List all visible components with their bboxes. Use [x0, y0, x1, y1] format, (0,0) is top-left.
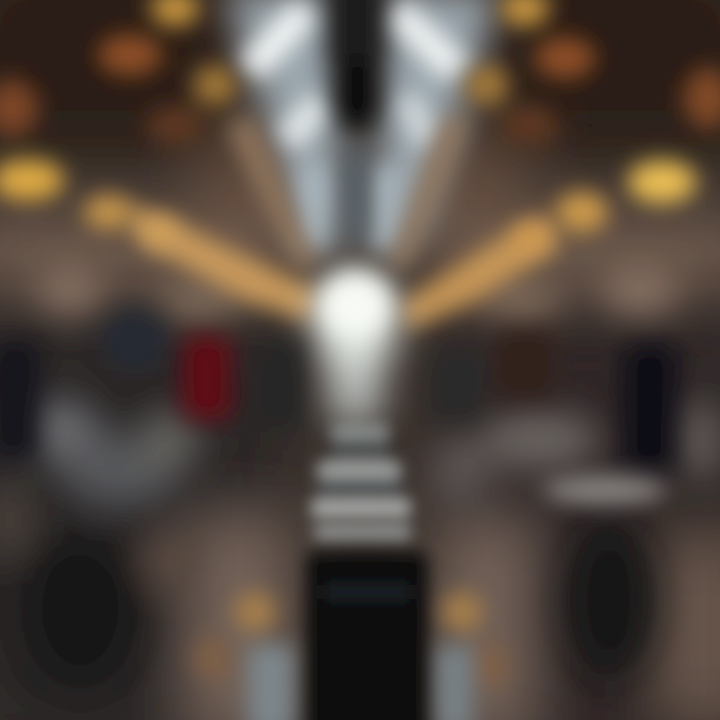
crowd mottling — [0, 266, 720, 690]
red garment — [182, 335, 232, 420]
center white glow — [313, 270, 397, 425]
top center skylight — [225, 0, 500, 250]
skylight bright streaks — [238, 0, 470, 250]
diagonal tan pillars — [225, 115, 470, 272]
silver garment highlight — [543, 476, 667, 504]
center dark column top — [328, 0, 384, 235]
upper dark ceiling — [0, 0, 720, 295]
golden beams — [120, 205, 560, 330]
dark figures — [0, 308, 675, 470]
center white core — [319, 273, 391, 337]
black center figure — [306, 552, 428, 720]
bottom floor edges — [248, 645, 473, 720]
lower crowd areas — [0, 320, 720, 720]
center stairs stripes — [312, 425, 410, 539]
